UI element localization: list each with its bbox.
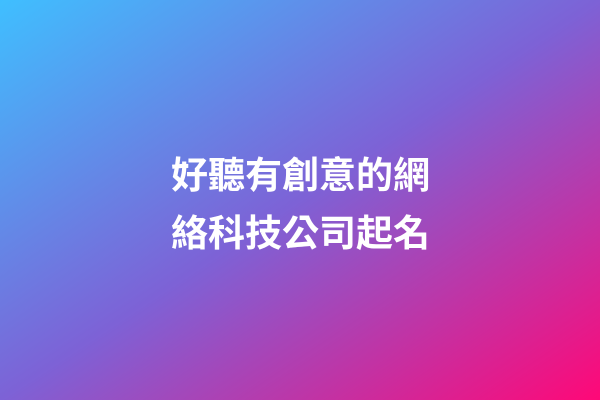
title line 2: 絡科技公司起名 (171, 213, 430, 254)
title line 1: 好聽有創意的網 (171, 155, 430, 196)
title (171, 155, 430, 254)
